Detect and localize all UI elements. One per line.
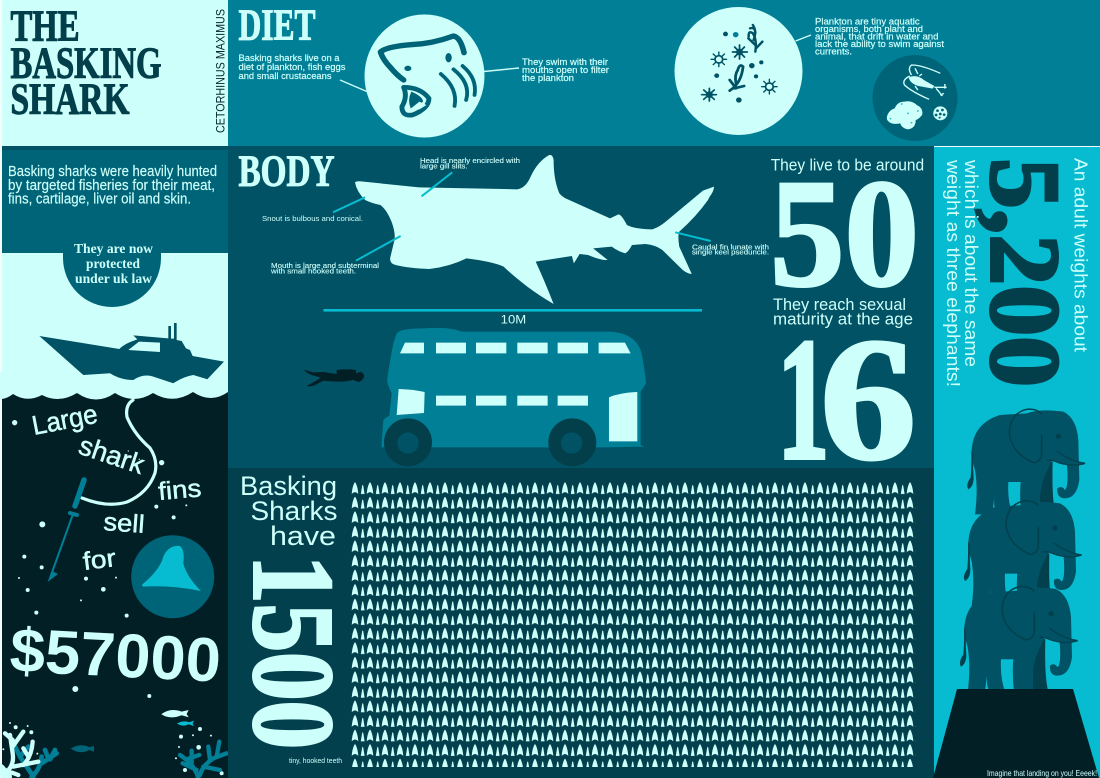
callout: snout: Snout is bulbous and conical.	[262, 214, 363, 223]
number: 5,200: 5,200	[970, 158, 1080, 387]
latin name: CETORHINUS MAXIMUS	[216, 9, 228, 133]
icon: coral right	[180, 742, 227, 778]
text: basking sharks have: Sharks	[250, 496, 338, 526]
stat: sexual maturity: 6	[820, 302, 916, 496]
stat: sexual maturity: They reach sexual	[773, 295, 906, 314]
callout: gills: large gill slits.	[420, 162, 468, 170]
text: elephant comparison	[943, 159, 981, 387]
callout: mouth	[270, 261, 379, 276]
bubbles	[2, 420, 224, 775]
hook message: sell	[103, 508, 145, 539]
text: diet description: diet of plankton, fish eggs	[238, 62, 346, 73]
callout: tail	[692, 243, 769, 257]
heading: the basking shark: BASKING	[10, 38, 162, 88]
callout line for plankton	[796, 35, 811, 41]
callout: gills	[420, 156, 520, 170]
light sky area	[0, 253, 228, 394]
badge: protected under uk law	[63, 242, 161, 307]
icon: coral left	[0, 732, 57, 777]
text: plankton description: Plankton are tiny aquatic	[815, 16, 920, 26]
callout: tail: single keel pseduncle.	[692, 248, 769, 257]
text: hunting description: fins, cartilage, liver oil and skin.	[8, 192, 191, 208]
hook message	[29, 399, 202, 576]
text: hunting description: Basking sharks were heavily hunted	[8, 164, 217, 180]
text: swim description	[522, 57, 609, 83]
callout lines for shark anatomy	[333, 172, 711, 261]
stat: sexual maturity: 1	[777, 303, 830, 497]
callout: tail: Caudal fin lunate with	[692, 243, 769, 252]
panel: teeth	[228, 468, 934, 778]
caption: tiny hooked teeth: tiny, hooked teeth	[289, 758, 342, 765]
hook message: fins	[157, 474, 202, 506]
heading: the basking shark: SHARK	[10, 74, 130, 124]
text: plankton description: lack the ability to swim against	[815, 39, 945, 49]
text: diet description: and small crustaceans	[238, 71, 332, 82]
icon: plankton circle	[674, 7, 802, 135]
callout lines for the shark head	[340, 68, 519, 92]
stat: lifespan: 50	[770, 149, 919, 319]
panel: ocean	[0, 385, 228, 778]
stat: sexual maturity: maturity at the age	[773, 310, 913, 328]
stat: sexual maturity	[773, 295, 916, 497]
heading: diet: DIET	[238, 0, 316, 50]
text: basking sharks have	[240, 471, 338, 551]
text: plankton description	[815, 16, 945, 56]
icon: double decker bus	[382, 328, 646, 466]
icon: harpoon	[48, 480, 84, 582]
callout: gills: Head is nearly encircled with	[420, 156, 520, 165]
text: hunting description: by targeted fisheries for their meat,	[8, 178, 215, 194]
text: elephant comparison: weight as three elephants!	[943, 159, 963, 387]
text: plankton description: animal, that drift in water and	[815, 32, 938, 42]
callout: mouth: with small hooked teeth.	[270, 267, 356, 276]
panel: hunting	[0, 146, 228, 394]
text: plankton description: currents.	[815, 46, 852, 56]
scale bar: 10M	[501, 312, 526, 326]
icon: stacked elephants	[960, 409, 1085, 692]
text: basking sharks have: Basking	[240, 471, 337, 501]
stat: lifespan: They live to be around	[771, 156, 924, 175]
panel: diet	[228, 0, 1100, 146]
badge: protected under uk law: protected	[86, 257, 140, 272]
text: basking sharks have: have	[270, 521, 336, 551]
panel: body	[228, 146, 934, 497]
panel: weight	[933, 147, 1100, 778]
waves	[0, 385, 228, 400]
badge: protected under uk law: They are now	[74, 242, 154, 257]
icon: zooplankton circle	[872, 55, 958, 141]
text: swim description: the plankton	[522, 73, 574, 83]
text: adult weight intro: An adult weights about	[1070, 158, 1090, 352]
fish	[71, 710, 194, 752]
panel: title	[2, 0, 228, 146]
icon: shark fin circle	[131, 535, 214, 618]
icon: fishing boat	[39, 323, 224, 383]
hook message: shark	[75, 430, 149, 480]
callout: mouth: Mouth is large and subterminal	[271, 261, 379, 270]
icon: diver	[304, 369, 364, 386]
price: $57000	[8, 616, 223, 696]
text: plankton description: organisms, both plant and	[815, 24, 923, 34]
heading: body: BODY	[238, 146, 334, 196]
hook message: Large	[29, 399, 100, 441]
heading: the basking shark: THE	[10, 2, 80, 50]
text: swim description: They swim with their	[522, 57, 608, 67]
fishing line and hook	[82, 400, 156, 504]
text: diet description	[238, 53, 346, 82]
text: elephant comparison: which is about the same	[961, 159, 981, 367]
pedestal	[933, 689, 1099, 778]
text: hunting description	[8, 164, 217, 208]
icon: shark head circle	[364, 14, 484, 138]
tooth grid	[351, 482, 916, 767]
text: diet description: Basking sharks live on a	[238, 53, 340, 64]
badge: protected under uk law: under uk law	[75, 272, 153, 287]
text: swim description: mouths open to filter	[522, 65, 609, 75]
shark silhouette	[355, 155, 714, 304]
hook message: for	[81, 544, 117, 576]
heading: the basking shark	[10, 2, 162, 124]
